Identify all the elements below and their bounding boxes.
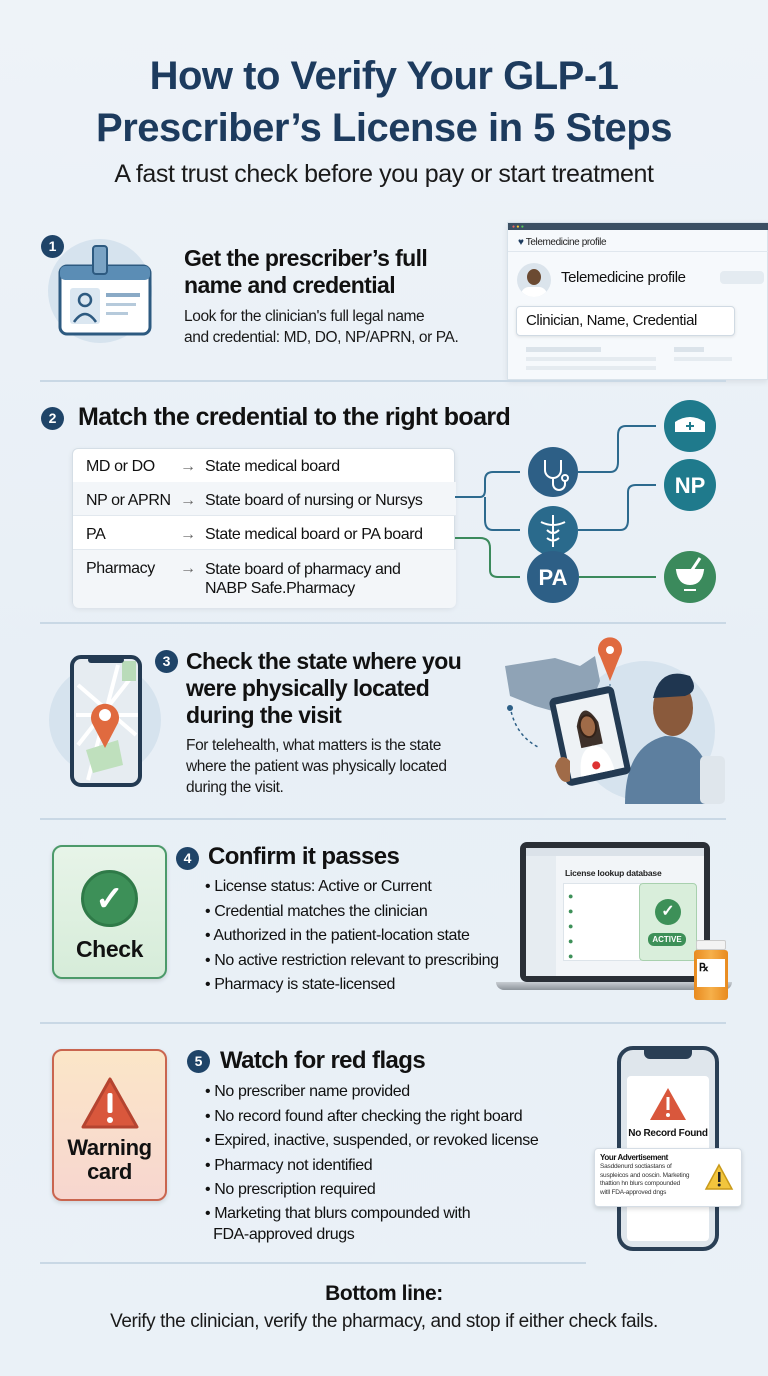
warning card: card bbox=[87, 1159, 132, 1184]
icon: stethoscope circle bbox=[528, 447, 578, 497]
table: credential to board: → bbox=[180, 492, 196, 509]
browser mockup: telemedicine profile: Clinician, Name, Credential bbox=[526, 312, 697, 329]
body 3: where the patient was physically located bbox=[186, 758, 447, 775]
icon: phone map bbox=[49, 655, 161, 787]
step 2 panel bbox=[41, 403, 510, 610]
body 1: and credential: MD, DO, NP/APRN, or PA. bbox=[184, 329, 458, 346]
heading 3 bbox=[186, 648, 461, 728]
title: How to Verify Your GLP-1 bbox=[150, 54, 618, 98]
bullet list 5: No prescription required bbox=[214, 1181, 375, 1198]
body 3 bbox=[186, 737, 447, 796]
illustration: laptop license lookup bbox=[496, 842, 732, 1000]
icon: pill bottle bbox=[696, 940, 726, 950]
bullet list 5: Pharmacy not identified bbox=[214, 1157, 372, 1174]
bullet list 4: License status: Active or Current bbox=[214, 878, 431, 895]
illustration: patient on tablet with map bbox=[505, 637, 725, 804]
illustration: laptop license lookup: ● bbox=[568, 891, 573, 901]
step 3 panel bbox=[49, 648, 461, 796]
illustration: phone no record found: Sasddenurd soctiastans of bbox=[600, 1163, 672, 1170]
bullet list 4: Credential matches the clinician bbox=[214, 903, 427, 920]
heading 5: Watch for red flags bbox=[220, 1047, 425, 1074]
badge 1 bbox=[41, 235, 64, 258]
title: Prescriber’s License in 5 Steps bbox=[96, 106, 672, 150]
browser mockup: telemedicine profile: Telemedicine profile bbox=[561, 269, 686, 286]
step 1 panel bbox=[41, 235, 458, 346]
table: credential to board: PA bbox=[86, 526, 105, 543]
flow diagram: boards bbox=[455, 400, 716, 603]
step 4 panel bbox=[50, 843, 499, 993]
table: credential to board: MD or DO bbox=[86, 458, 155, 475]
illustration: laptop license lookup: ● bbox=[568, 951, 573, 961]
table: credential to board: → bbox=[180, 526, 196, 543]
body 3: For telehealth, what matters is the state bbox=[186, 737, 441, 754]
heading 1: name and credential bbox=[184, 272, 395, 298]
illustration: laptop license lookup: ● bbox=[568, 936, 573, 946]
icon: caduceus circle bbox=[528, 506, 578, 556]
step 5 panel bbox=[50, 1047, 538, 1243]
illustration: laptop license lookup: ACTIVE bbox=[652, 935, 682, 944]
heading 2: Match the credential to the right board bbox=[78, 403, 510, 431]
badge 5 bbox=[187, 1050, 210, 1073]
illustration: laptop license lookup: ✓ bbox=[661, 903, 675, 920]
bullet list 5 bbox=[206, 1083, 538, 1243]
table: credential to board: State board of pharmacy and bbox=[205, 561, 401, 578]
illustration: laptop license lookup: License lookup database bbox=[565, 868, 662, 878]
badge 4: 4 bbox=[184, 850, 191, 866]
table: credential to board: State medical board bbox=[205, 458, 340, 475]
badge 1: 1 bbox=[49, 238, 56, 254]
table: credential to board: NP or APRN bbox=[86, 492, 171, 509]
bullet list 5: FDA-approved drugs bbox=[213, 1226, 354, 1243]
heading 3: were physically located bbox=[186, 675, 429, 701]
table: credential to board bbox=[72, 448, 455, 607]
illustration: phone no record found: No Record Found bbox=[628, 1128, 708, 1139]
bullet list 5: No record found after checking the right board bbox=[214, 1108, 522, 1125]
icon: NP circle bbox=[664, 459, 716, 511]
browser mockup: telemedicine profile: ● ● ● bbox=[512, 224, 524, 230]
illustration: laptop license lookup: ● bbox=[568, 906, 573, 916]
warning card bbox=[52, 1049, 167, 1201]
heading 3: Check the state where you bbox=[186, 648, 461, 674]
badge 2 bbox=[41, 407, 64, 430]
table: credential to board: State medical board or PA board bbox=[205, 526, 423, 543]
icon: PA circle bbox=[527, 551, 579, 603]
badge 5: 5 bbox=[195, 1053, 202, 1069]
illustration: phone no record found bbox=[592, 1046, 744, 1251]
heading 4: Confirm it passes bbox=[208, 843, 399, 870]
bullet list 5: Expired, inactive, suspended, or revoked license bbox=[214, 1132, 538, 1149]
bullet list 5: Marketing that blurs compounded with bbox=[214, 1205, 470, 1222]
icon: nurse cap circle bbox=[664, 400, 716, 452]
warning card: Warning bbox=[67, 1135, 152, 1160]
illustration: phone no record found: suspleicos and ooscin. Marketing bbox=[600, 1172, 689, 1178]
badge 3 bbox=[155, 650, 178, 673]
bullet list 5: No prescriber name provided bbox=[214, 1083, 410, 1100]
heading 1 bbox=[184, 245, 427, 298]
heading 3: during the visit bbox=[186, 702, 341, 728]
illustration: phone no record found: Your Advertisement bbox=[600, 1153, 668, 1162]
bullet list 4 bbox=[206, 878, 499, 993]
icon: PA circle: PA bbox=[539, 565, 568, 590]
browser mockup: telemedicine profile bbox=[507, 222, 768, 380]
check card bbox=[52, 845, 167, 979]
title bbox=[96, 54, 672, 150]
illustration: laptop license lookup: ● bbox=[568, 921, 573, 931]
bullet list 4: No active restriction relevant to prescribing bbox=[214, 952, 499, 969]
table: credential to board: State board of nursing or Nursys bbox=[205, 492, 423, 509]
illustration: laptop license lookup: ℞ bbox=[699, 962, 709, 974]
bottom line bbox=[110, 1282, 658, 1332]
check card: ✓ bbox=[95, 880, 124, 918]
bullet list 4: Pharmacy is state-licensed bbox=[214, 976, 395, 993]
table: credential to board: NABP Safe.Pharmacy bbox=[205, 580, 355, 597]
badge 4 bbox=[176, 847, 199, 870]
icon: NP circle: NP bbox=[675, 473, 705, 498]
icon: id badge bbox=[48, 239, 152, 343]
heading 1: Get the prescriber’s full bbox=[184, 245, 427, 271]
icon: mortar circle bbox=[664, 551, 716, 603]
browser mockup: telemedicine profile: ♥ Telemedicine profile bbox=[518, 237, 606, 248]
bottom line: Bottom line: bbox=[325, 1282, 443, 1305]
body 1: Look for the clinician's full legal name bbox=[184, 308, 424, 325]
bullet list 4: Authorized in the patient-location state bbox=[213, 927, 470, 944]
subtitle: A fast trust check before you pay or start treatment bbox=[114, 160, 654, 188]
body 1 bbox=[184, 308, 458, 346]
body 3: during the visit. bbox=[186, 779, 283, 796]
badge 3: 3 bbox=[163, 653, 170, 669]
check card: Check bbox=[76, 936, 143, 962]
illustration: phone no record found: witll FDA-approved dngs bbox=[600, 1188, 666, 1196]
badge 2: 2 bbox=[49, 410, 56, 426]
table: credential to board: → bbox=[180, 458, 196, 475]
illustration: phone no record found: thattion hn blurs compounded bbox=[600, 1180, 680, 1187]
table: credential to board: Pharmacy bbox=[86, 560, 155, 577]
table: credential to board: → bbox=[180, 560, 196, 577]
bottom line: Verify the clinician, verify the pharmacy, and stop if either check fails. bbox=[110, 1311, 658, 1332]
